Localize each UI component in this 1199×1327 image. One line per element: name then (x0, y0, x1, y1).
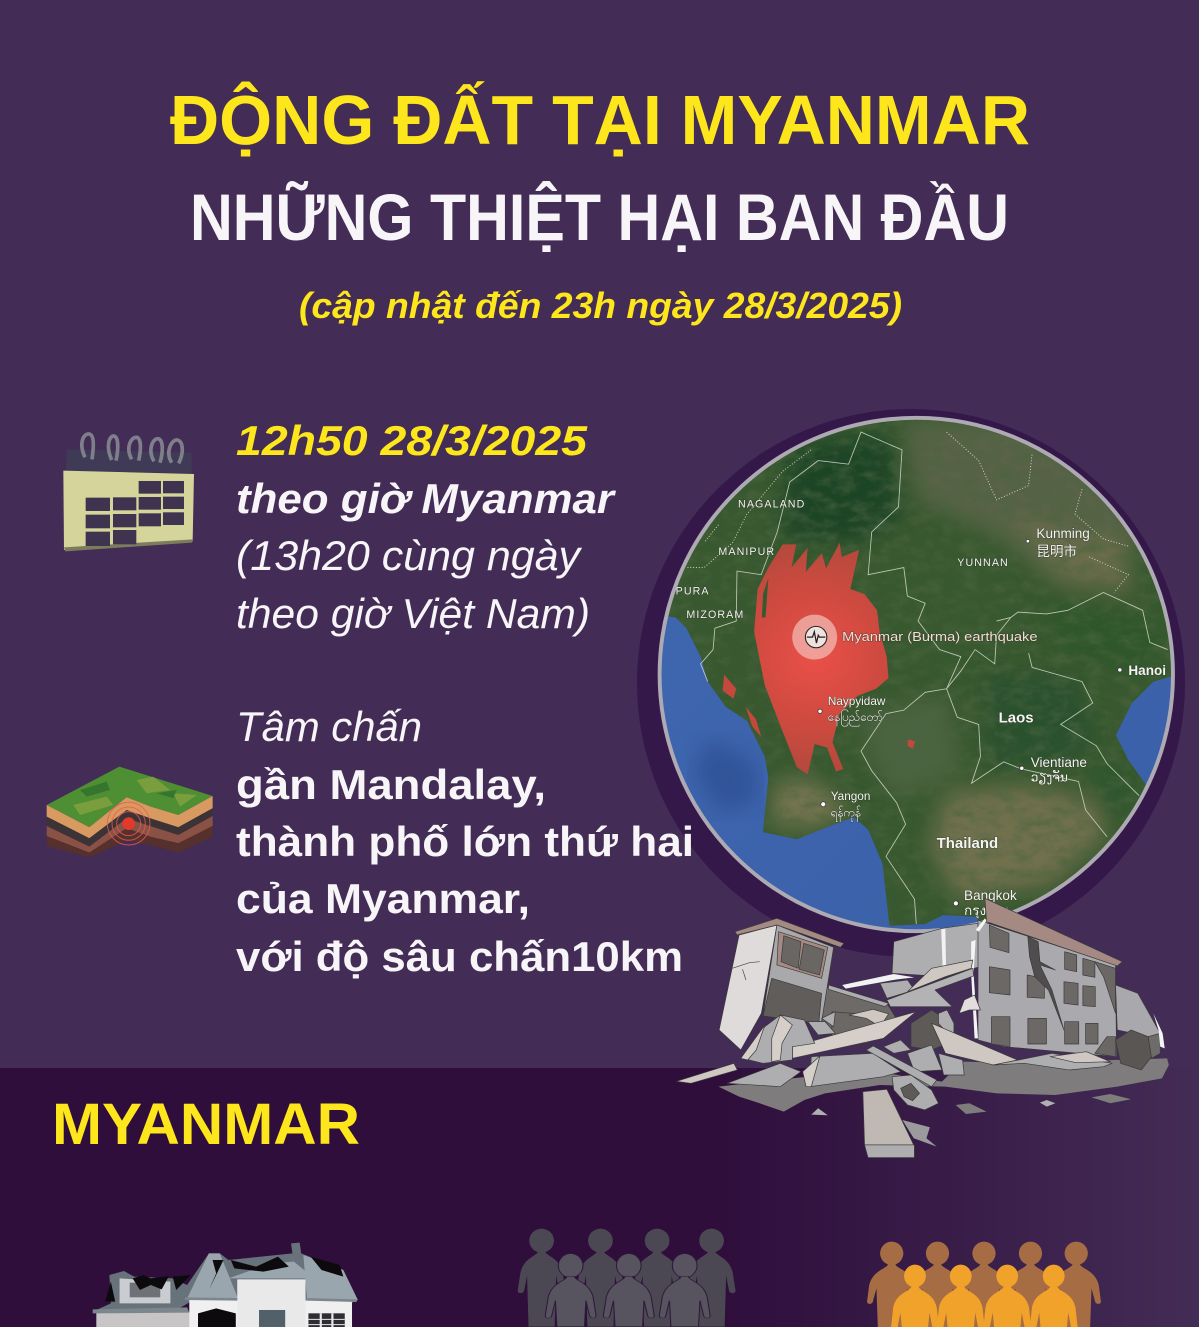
map labels: Laos (999, 709, 1034, 726)
lower section band (0, 1068, 1199, 1327)
rubble front slabs (810, 1053, 901, 1087)
time and epicentre text (236, 417, 694, 980)
icon: epicentre ground block (47, 767, 213, 857)
left tilted block (719, 925, 777, 1050)
epicentre description: với độ sâu chấn10km (236, 933, 683, 980)
shaking intensity area (723, 543, 915, 774)
map labels: ရန်ကုန် (831, 806, 861, 821)
map labels (676, 499, 1166, 919)
land (651, 411, 1178, 935)
right building (978, 920, 1117, 1057)
illustration: collapsed building (677, 898, 1169, 1158)
map labels: 昆明市 (1036, 543, 1077, 559)
epicentre description: gần Mandalay, (236, 761, 546, 808)
map labels: နေပြည်တော် (828, 710, 883, 726)
title (170, 80, 1030, 254)
map labels: Yangon (831, 790, 870, 803)
ground shadow (718, 1058, 1169, 1112)
seismic waves (107, 802, 150, 845)
event time (236, 417, 617, 637)
map labels: Kunming (1036, 526, 1090, 541)
epicentre description: của Myanmar, (236, 875, 530, 922)
map: earthquake area (651, 411, 1182, 935)
rear collapsed wall (892, 923, 980, 977)
icon: damaged house (93, 1243, 358, 1327)
deep sea shading (693, 739, 758, 814)
epicentre marker (792, 615, 837, 660)
map ring backdrop (637, 409, 1185, 957)
right side rubble (1116, 985, 1160, 1037)
map labels: Thailand (937, 835, 998, 852)
epicentre description: Tâm chấn (236, 703, 422, 750)
map rim (660, 418, 1173, 931)
terrain texture (654, 414, 1182, 935)
update date note: (cập nhật đến 23h ngày 28/3/2025) (299, 285, 902, 326)
map labels: Vientiane (1031, 755, 1087, 770)
map labels: กรุงเทพ (964, 903, 1009, 919)
sea (662, 616, 1171, 930)
epicentre description (236, 703, 694, 980)
title: ĐỘNG ĐẤT TẠI MYANMAR (170, 80, 1030, 159)
title: NHỮNG THIỆT HẠI BAN ĐẦU (190, 180, 1009, 254)
map labels: Myanmar (Burma) earthquake (842, 630, 1038, 644)
house damage (105, 1257, 343, 1327)
city dots (818, 539, 1122, 906)
rubble centre (832, 1012, 894, 1043)
right building roof (985, 898, 1122, 966)
terrain colour patches (654, 414, 1182, 935)
borders (701, 432, 1168, 924)
map labels: NAGALAND (738, 499, 805, 511)
icon: grey people group (518, 1229, 736, 1327)
calendar rings (82, 434, 182, 463)
fallen slab (863, 1089, 914, 1145)
icon: orange people group (867, 1242, 1101, 1327)
event time: theo giờ Việt Nam) (236, 590, 590, 637)
map labels: MANIPUR (718, 546, 775, 558)
icon: calendar (63, 434, 194, 551)
map labels: ວຽງຈັນ (1031, 770, 1068, 784)
map labels: Bangkok (964, 888, 1017, 903)
epicentre description: thành phố lớn thứ hai (236, 818, 694, 865)
map labels: PURA (676, 585, 710, 597)
map labels: Naypyidaw (828, 695, 886, 708)
left block roof (735, 918, 844, 947)
internal dotted borders (686, 432, 1128, 593)
map labels: YUNNAN (957, 557, 1009, 569)
event time: 12h50 28/3/2025 (236, 417, 588, 464)
map labels: Hanoi (1128, 663, 1166, 678)
map labels: MIZORAM (686, 609, 744, 621)
event time: (13h20 cùng ngày (236, 532, 583, 579)
event time: theo giờ Myanmar (236, 475, 617, 522)
section heading: Myanmar: MYANMAR (52, 1092, 360, 1157)
